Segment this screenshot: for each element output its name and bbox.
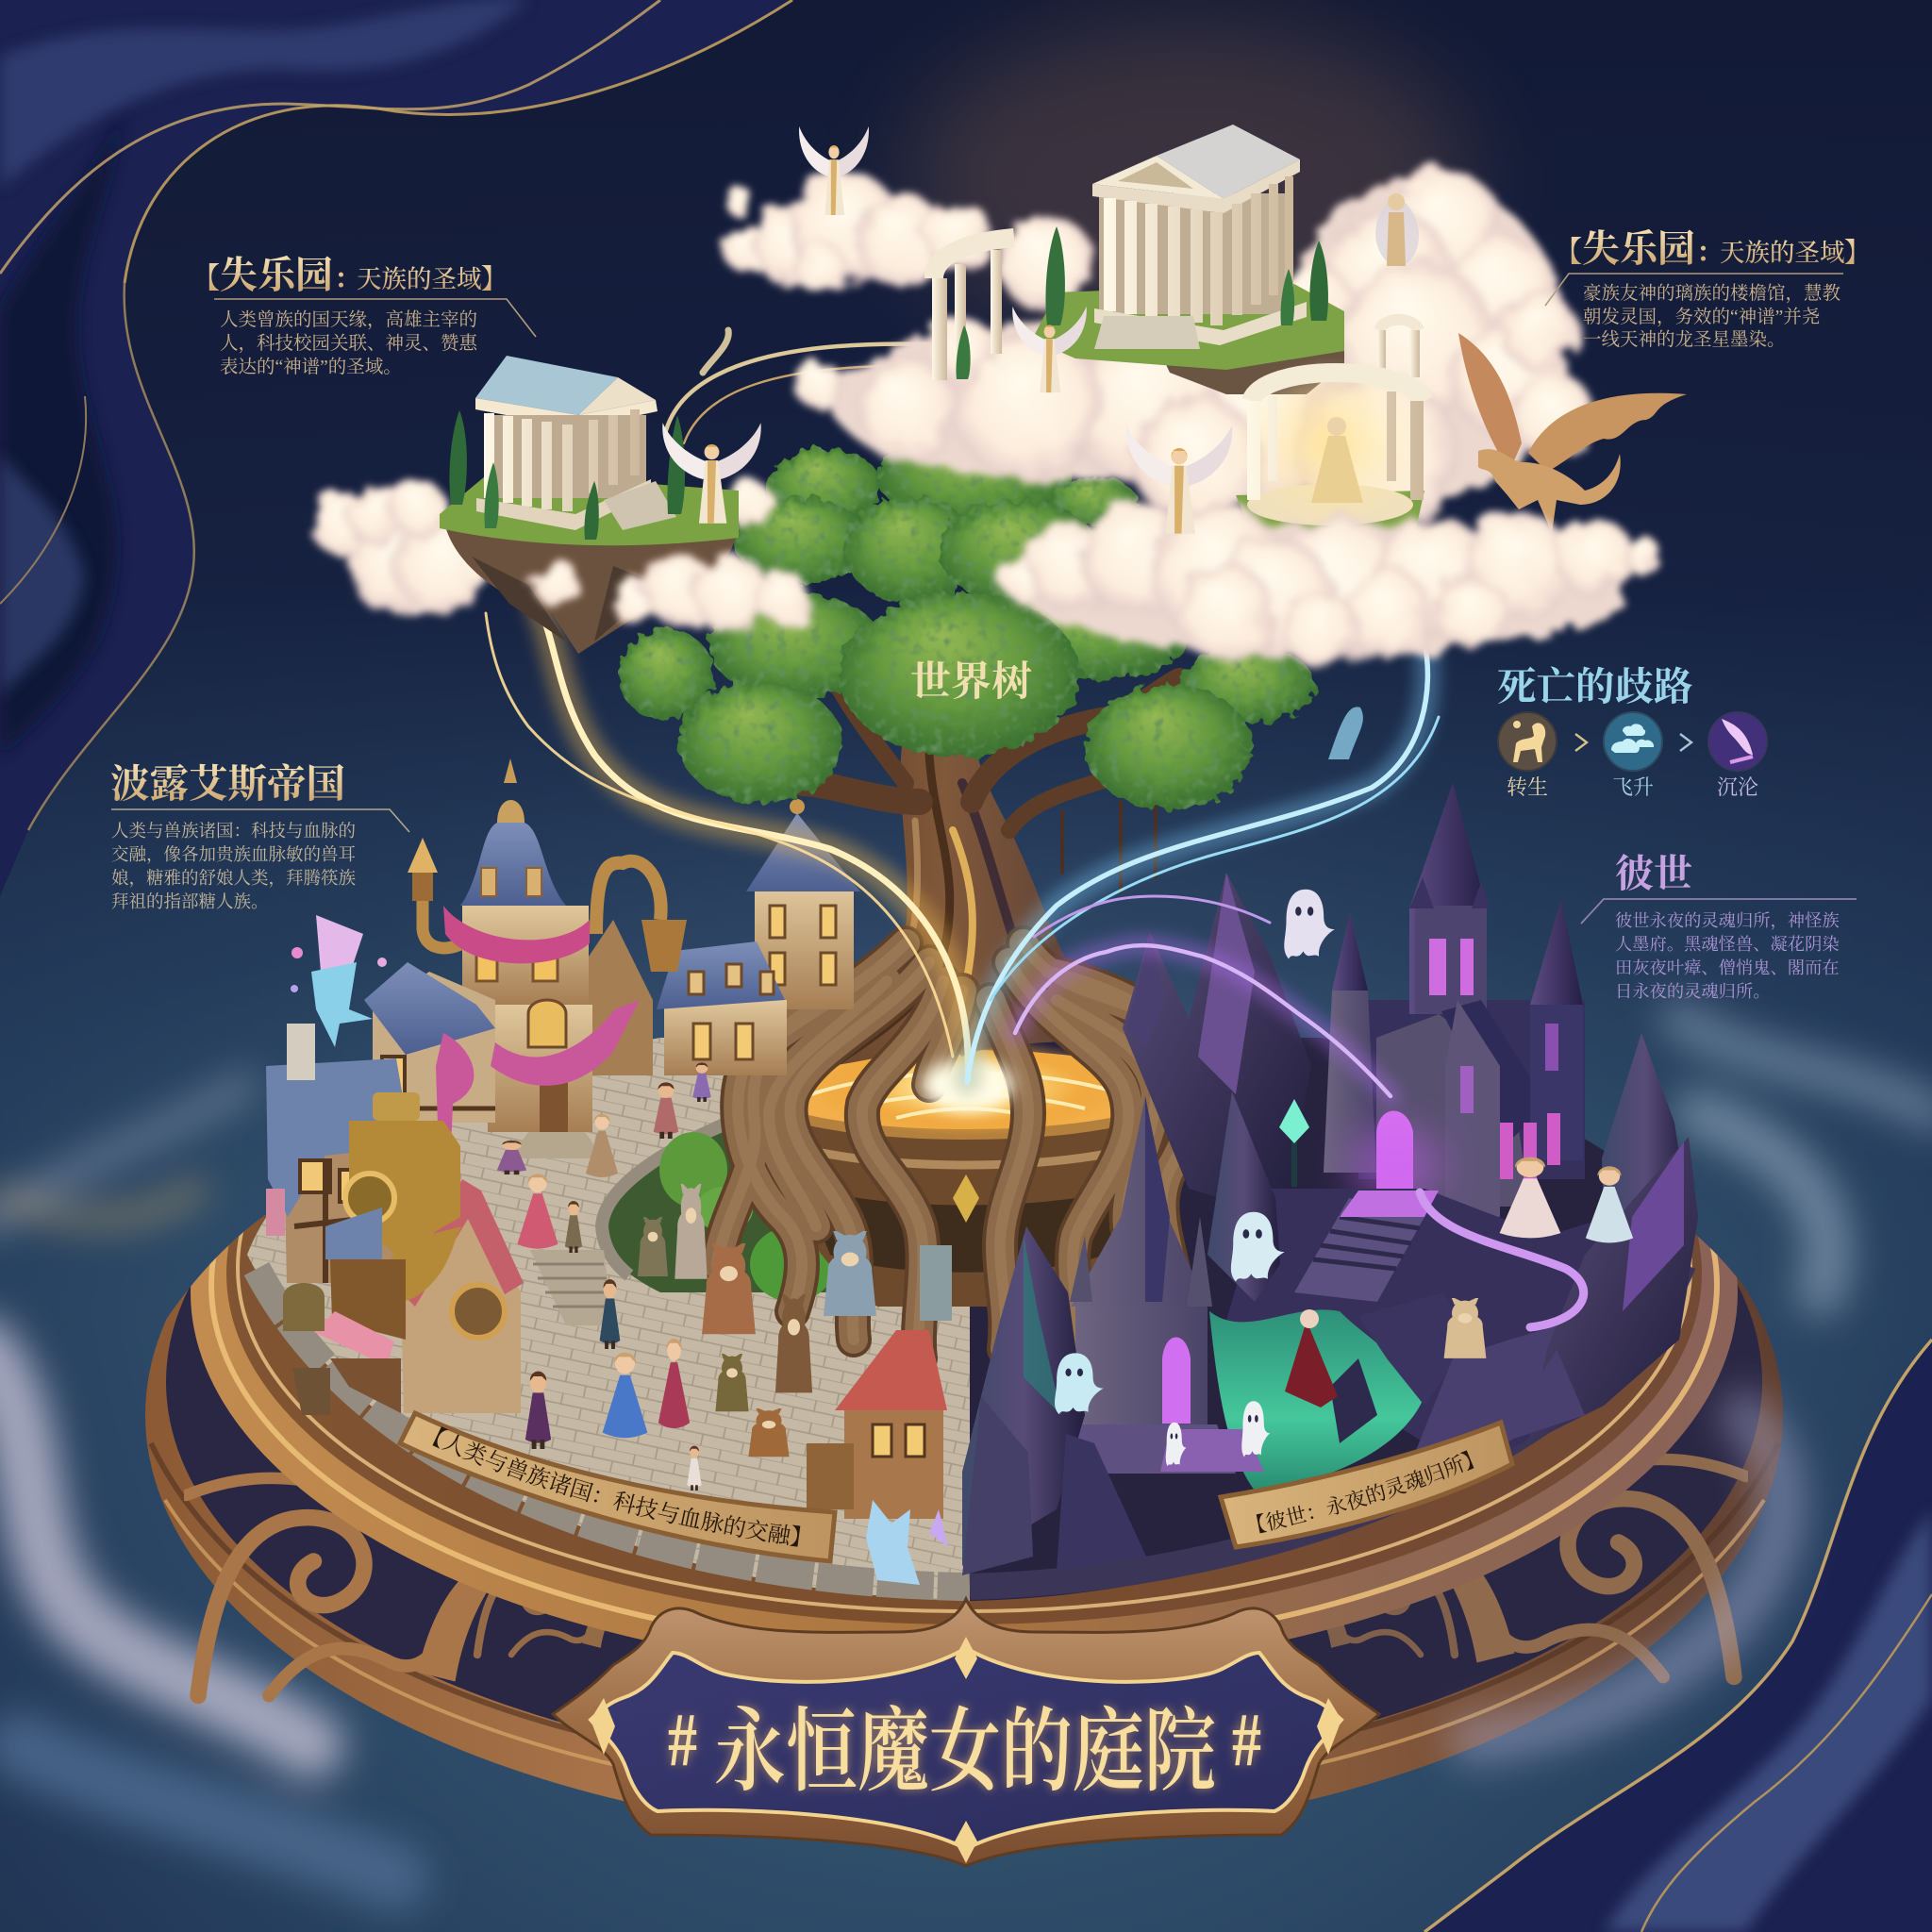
angel above front cloud <box>1126 425 1232 534</box>
angel above small cloud <box>799 126 869 215</box>
left floating island <box>440 356 761 654</box>
brass steam machine workshop <box>283 1092 524 1415</box>
castle entrance tower <box>1445 1000 1500 1217</box>
foreground crags <box>962 1226 1146 1575</box>
plaque title text: # <box>1232 1697 1261 1782</box>
callout body: 豪族友神的璃族的楼檐馆，慧教 <box>1583 283 1841 304</box>
energy stream: blue to the spirits <box>967 641 1439 1082</box>
twisting roots, dark edge <box>717 943 1203 1358</box>
green spirit pool <box>1209 1309 1424 1491</box>
left island rear clouds <box>310 480 774 615</box>
otherworld body: 日永夜的灵魂归所。 <box>1615 982 1771 1001</box>
callout heading: 失乐园 <box>220 254 333 296</box>
icon: ascension clouds <box>1604 712 1662 771</box>
callout heading: ： <box>1696 239 1723 268</box>
otherworld heading: 彼世 <box>1615 852 1692 895</box>
callout body: 一线天神的龙圣星墨染。 <box>1583 329 1786 350</box>
right callout: otherworld <box>1581 852 1857 1001</box>
castle left tower <box>1324 913 1376 1173</box>
banner: otherworld <box>1217 1419 1515 1550</box>
right callout: paradise <box>1545 227 1871 350</box>
pedestal scrollwork left <box>187 1478 636 1696</box>
shrine goddess <box>1311 436 1363 503</box>
tree branches <box>802 651 1179 891</box>
small arch right <box>1377 320 1420 377</box>
otherworld body: 人墨府。黑魂怪兽、凝花阴染 <box>1615 935 1840 954</box>
tree trunk <box>774 745 1157 1066</box>
marble swirl: bottom right <box>1424 1340 1932 1932</box>
right callout: paths of death <box>1497 665 1767 799</box>
left arch colonnade <box>932 238 1014 380</box>
twisting roots, highlight <box>717 943 1203 1358</box>
foreground chapel <box>1058 1096 1264 1474</box>
left callout: paradise <box>192 254 536 377</box>
rocky outcrops over pool <box>1358 1292 1472 1406</box>
cloud in front of left island <box>532 552 811 634</box>
dragon <box>1458 333 1687 533</box>
ground: dark rock, right half <box>970 1038 1694 1601</box>
right rear rock <box>1602 1033 1689 1217</box>
pedestal scrollwork right <box>1296 1459 1745 1677</box>
icon labels: 飞升 <box>1612 775 1654 799</box>
marble swirl: top left <box>0 0 792 896</box>
main sky temple <box>1032 125 1344 394</box>
energy stream: gold from the world tree <box>486 330 968 1080</box>
arrow <box>1575 734 1587 751</box>
brass pipes and boiler <box>408 838 687 972</box>
temple island <box>1157 321 1344 394</box>
small top cloud <box>721 170 993 295</box>
left wing house <box>364 962 495 1123</box>
icon: descent wisp <box>1708 712 1767 771</box>
arrow <box>1680 734 1691 751</box>
left callout: empire <box>110 762 409 912</box>
rock underside <box>444 522 739 654</box>
twisting roots, body <box>717 943 1203 1358</box>
angel on the temple steps <box>1012 307 1087 392</box>
otherworld body: 彼世永夜的灵魂归所，神怪族 <box>1615 911 1840 930</box>
stone bowl <box>755 1094 1179 1307</box>
village: human and beastfolk realm <box>266 758 952 1585</box>
callout body: 人，科技校园关联、神灵、赞惠 <box>220 333 479 354</box>
rear tower <box>746 799 860 1009</box>
tall dark peak <box>1208 1091 1280 1302</box>
mist: left <box>0 1085 396 1877</box>
icon: reincarnation dog <box>1498 712 1557 771</box>
empire body: 拜祖的指部糖人族。 <box>111 892 269 912</box>
half-timbered cottage <box>266 1024 411 1283</box>
plaque gold ornaments <box>591 1637 1341 1863</box>
paths heading: 死亡的歧路 <box>1497 665 1693 708</box>
castle backing mass <box>1358 1000 1585 1179</box>
front town house <box>807 1330 947 1519</box>
statue in clouds <box>1375 193 1419 266</box>
ghosts and vampire figures <box>1055 890 1633 1467</box>
banner: human and beastfolk realm: 【人类与兽族诸国：科技与血脉的交融】 <box>432 1426 800 1547</box>
rear mountains <box>1123 873 1311 1217</box>
pedestal bronze ring <box>191 1214 1738 1640</box>
bowl glow <box>753 1053 1179 1140</box>
underworld: dark mountains and gothic castle <box>962 783 1698 1575</box>
purple stairway <box>1294 1191 1439 1302</box>
sunken grove <box>602 1120 849 1292</box>
jagged rim rocks <box>1415 1137 1698 1481</box>
circular pedestal base <box>145 1214 1783 1802</box>
castle gate <box>1376 1111 1413 1191</box>
crystal golem front <box>866 1500 948 1585</box>
crystal sprite left <box>291 915 387 1047</box>
callout heading: 】 <box>481 264 508 294</box>
gate lantern <box>1279 1099 1309 1187</box>
title plaque <box>553 1599 1379 1866</box>
mist in front of pedestal right <box>1472 1415 1782 1740</box>
ground: stone plaza, left half <box>247 1038 970 1601</box>
plaque title text: # <box>668 1697 697 1782</box>
pedestal dark ornamental band <box>166 1215 1762 1723</box>
left temple <box>449 356 685 540</box>
otherworld body: 田灰夜叶瘴、僧悄鬼、閣而在 <box>1615 958 1840 977</box>
townsfolk <box>497 1062 952 1491</box>
mist: right <box>1679 1019 1932 1292</box>
plaque title text: 永恒魔女的庭院 <box>714 1701 1216 1803</box>
callout heading: 【 <box>192 263 220 294</box>
empire body: 娘，糖雅的舒娘人类，拜腾筷族 <box>111 869 357 889</box>
trunk bark strands <box>821 755 1028 1066</box>
grass top <box>440 472 739 545</box>
palace with dome <box>443 758 604 1158</box>
rocks under the castle <box>1226 1189 1689 1472</box>
pink drapes <box>436 1000 640 1156</box>
temple building <box>1099 193 1292 314</box>
row house <box>657 941 787 1075</box>
glowing ring shrine <box>1233 357 1431 552</box>
callout heading: 】 <box>1844 238 1871 268</box>
heading: world tree label: 世界树 <box>910 659 1032 705</box>
callout heading: 【 <box>1554 237 1582 268</box>
callout heading: 天族的圣域 <box>357 265 481 293</box>
right wing <box>585 920 653 1075</box>
icon labels: 沉沦 <box>1717 775 1758 799</box>
main gothic castle <box>1324 783 1585 1217</box>
banner: otherworld: 【彼世：永夜的灵魂归所】 <box>1257 1450 1474 1534</box>
castle right tower <box>1530 1000 1583 1160</box>
empire heading: 波露艾斯帝国 <box>110 762 345 806</box>
tree canopy <box>618 429 1315 809</box>
energy stream: purple into the underworld <box>1015 896 1584 1327</box>
empire body: 交融，像各加贵族血脉敏的兽耳 <box>111 845 356 865</box>
callout heading: 失乐园 <box>1582 227 1695 270</box>
callout heading: ： <box>334 265 360 294</box>
callout heading: 天族的圣域 <box>1720 239 1845 267</box>
world tree trunk, bowl and roots <box>602 651 1203 1358</box>
plaque navy panel <box>591 1648 1341 1849</box>
main cloud bank, rear <box>794 168 1595 533</box>
central glow <box>923 1058 1013 1111</box>
callout body: 朝发灵国，务效的“神谱”并尧 <box>1583 307 1820 327</box>
stairway <box>530 1250 613 1325</box>
castle central spire tower <box>1409 783 1487 1014</box>
plaque bronze frame <box>553 1599 1379 1866</box>
castle nave <box>1376 1014 1530 1207</box>
main cloud bank, front <box>999 500 1665 670</box>
icon labels: 转生 <box>1507 775 1548 799</box>
callout body: 人类曾族的国天缘，高雄主宰的 <box>220 309 477 330</box>
callout body: 表达的“神谱”的圣域。 <box>220 357 402 377</box>
empire body: 人类与兽族诸国：科技与血脉的 <box>111 822 356 841</box>
angel on left island <box>662 423 761 524</box>
